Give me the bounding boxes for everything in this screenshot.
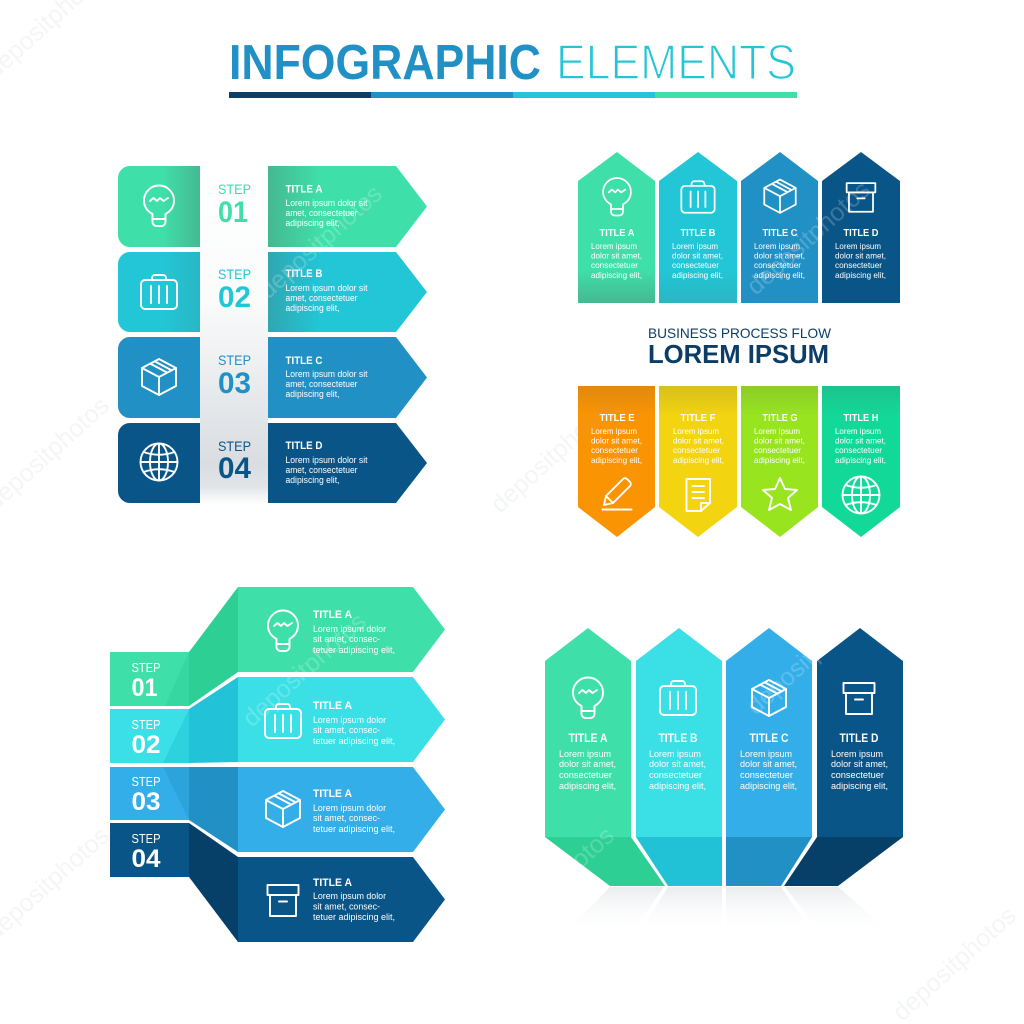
card A: [578, 152, 655, 303]
step row 4: amet, consectetuer: [286, 465, 358, 475]
title: INFOGRAPHIC: [229, 36, 541, 90]
panel: step list: [118, 166, 427, 504]
card F: adipiscing elit,: [673, 455, 724, 465]
card A: TITLE A: [600, 227, 635, 239]
card B: [659, 152, 737, 303]
card B: Lorem ipsum: [672, 241, 718, 251]
step row 1: 01: [218, 196, 248, 229]
column C: consectetuer: [740, 770, 793, 780]
step row 2: Lorem ipsum dolor sit: [286, 283, 368, 293]
ribbon 3: TITLE A: [313, 788, 352, 800]
ribbon 2: sit amet, consec-: [313, 725, 380, 735]
card E: dolor sit amet,: [591, 436, 642, 446]
ribbon 2: 02: [132, 731, 160, 759]
column D: consectetuer: [831, 770, 884, 780]
card A: Lorem ipsum: [591, 241, 637, 251]
step row 1: adipiscing elit,: [286, 218, 340, 228]
card D: consectetuer: [835, 260, 882, 270]
card B: TITLE B: [680, 227, 716, 239]
step row 1: amet, consectetuer: [286, 208, 358, 218]
card F: TITLE F: [680, 412, 716, 424]
column B: adipiscing elit,: [649, 781, 706, 791]
ribbon 3: STEP: [132, 775, 160, 789]
card C: [741, 152, 818, 303]
card D: Lorem ipsum: [835, 241, 881, 251]
card G: TITLE G: [762, 412, 798, 424]
step row 4: STEP: [218, 438, 251, 454]
ribbon 1: [110, 587, 445, 706]
column D: adipiscing elit,: [831, 781, 888, 791]
watermark: depositphotos: [741, 175, 876, 300]
card C: dolor sit amet,: [754, 250, 805, 260]
ribbon 1: 01: [132, 674, 158, 702]
card G: consectetuer: [754, 445, 801, 455]
ribbon 1: Lorem ipsum dolor: [313, 624, 386, 634]
step row 3: TITLE C: [286, 355, 323, 367]
card F: Lorem ipsum: [673, 426, 719, 436]
card G: dolor sit amet,: [754, 436, 805, 446]
step row 2: [118, 252, 427, 332]
panel: downward hexagon cards: [578, 386, 900, 537]
panel: upward hexagon cards: [578, 152, 900, 303]
step row 1: TITLE A: [286, 184, 323, 196]
column B: TITLE B: [658, 733, 698, 745]
title: [229, 36, 796, 90]
step row 3: 03: [218, 367, 251, 400]
ribbon 4: [110, 823, 445, 942]
card F: [659, 386, 737, 537]
card H: consectetuer: [835, 445, 882, 455]
column C: TITLE C: [750, 733, 788, 745]
card A: dolor sit amet,: [591, 250, 642, 260]
step row 3: amet, consectetuer: [286, 379, 358, 389]
ribbon 4: sit amet, consec-: [313, 902, 380, 912]
column A: dolor sit amet,: [559, 759, 616, 769]
column B: Lorem ipsum: [649, 749, 701, 759]
ribbon 1: tetuer adipiscing elit,: [313, 645, 395, 655]
step row 3: [118, 337, 427, 418]
card H: TITLE H: [844, 412, 878, 424]
step row 1: [118, 166, 427, 247]
card D: adipiscing elit,: [835, 270, 886, 280]
card B: dolor sit amet,: [672, 250, 723, 260]
step row 4: 04: [218, 452, 251, 485]
ribbon 2: STEP: [132, 718, 160, 732]
step row 2: adipiscing elit,: [286, 303, 340, 313]
ribbon 4: STEP: [132, 832, 160, 846]
card G: Lorem ipsum: [754, 426, 800, 436]
card D: [822, 152, 900, 303]
watermark: depositphotos: [485, 821, 620, 946]
step row 2: TITLE B: [286, 268, 323, 280]
step row 3: Lorem ipsum dolor sit: [286, 369, 368, 379]
column D: TITLE D: [840, 733, 878, 745]
step row 2: 02: [218, 281, 251, 314]
step row 4: Lorem ipsum dolor sit: [286, 455, 368, 465]
watermark: depositphotos: [253, 179, 388, 304]
panel: folded columns with reflection: [545, 628, 903, 932]
step row 1: STEP: [218, 181, 251, 197]
step row 1: Lorem ipsum dolor sit: [286, 198, 368, 208]
card C: TITLE C: [762, 227, 798, 239]
ribbon 2: Lorem ipsum dolor: [313, 715, 386, 725]
step row 4: adipiscing elit,: [286, 475, 340, 485]
step row 3: adipiscing elit,: [286, 389, 340, 399]
ribbon 3: Lorem ipsum dolor: [313, 803, 386, 813]
card G: [741, 386, 818, 537]
card A: adipiscing elit,: [591, 270, 642, 280]
step row 2: STEP: [218, 266, 251, 282]
column A: adipiscing elit,: [559, 781, 616, 791]
ribbon 4: TITLE A: [313, 877, 352, 889]
ribbon 1: sit amet, consec-: [313, 634, 380, 644]
ribbon 3: sit amet, consec-: [313, 813, 380, 823]
ribbon 2: TITLE A: [313, 700, 352, 712]
card D: dolor sit amet,: [835, 250, 886, 260]
column B: consectetuer: [649, 770, 702, 780]
ribbon 4: tetuer adipiscing elit,: [313, 912, 395, 922]
ribbon 1: TITLE A: [313, 609, 352, 621]
ribbon 4: Lorem ipsum dolor: [313, 891, 386, 901]
ribbon 2: [110, 677, 445, 763]
column B: [636, 628, 722, 886]
card H: adipiscing elit,: [835, 455, 886, 465]
column A: Lorem ipsum: [559, 749, 611, 759]
watermark: depositphotos: [237, 607, 372, 732]
column A: [545, 628, 665, 886]
card H: dolor sit amet,: [835, 436, 886, 446]
card G: adipiscing elit,: [754, 455, 805, 465]
card C: Lorem ipsum: [754, 241, 800, 251]
card F: consectetuer: [673, 445, 720, 455]
card C: consectetuer: [754, 260, 801, 270]
watermark: depositphotos: [485, 393, 620, 518]
ribbon 3: [110, 767, 445, 852]
card E: TITLE E: [600, 412, 634, 424]
ribbon 1: STEP: [132, 661, 160, 675]
column A: TITLE A: [568, 733, 608, 745]
column C: [726, 628, 812, 886]
ribbon 2: tetuer adipiscing elit,: [313, 736, 395, 746]
column B: dolor sit amet,: [649, 759, 706, 769]
step row 2: amet, consectetuer: [286, 293, 358, 303]
card A: consectetuer: [591, 260, 638, 270]
card E: [578, 386, 655, 537]
column A: consectetuer: [559, 770, 612, 780]
card B: consectetuer: [672, 260, 719, 270]
panel: folded step ribbons: [110, 587, 445, 942]
floor reflection: [566, 887, 890, 932]
watermark: depositphotos: [741, 595, 876, 720]
column D: dolor sit amet,: [831, 759, 888, 769]
title colour bar: [229, 92, 797, 98]
title: ELEMENTS: [556, 36, 796, 90]
card B: adipiscing elit,: [672, 270, 723, 280]
card E: Lorem ipsum: [591, 426, 637, 436]
column C: Lorem ipsum: [740, 749, 792, 759]
column C: dolor sit amet,: [740, 759, 797, 769]
step row 4: TITLE D: [286, 440, 323, 452]
heading: business process flow: BUSINESS PROCESS FLOW: [648, 325, 832, 341]
card H: [822, 386, 900, 537]
card D: TITLE D: [844, 227, 879, 239]
heading: business process flow: [648, 325, 832, 369]
card F: dolor sit amet,: [673, 436, 724, 446]
ribbon 3: tetuer adipiscing elit,: [313, 824, 395, 834]
step row 3: STEP: [218, 352, 251, 368]
watermark: depositphotos: [887, 901, 1022, 1024]
ribbon 3: 03: [132, 788, 160, 816]
card E: consectetuer: [591, 445, 638, 455]
card C: adipiscing elit,: [754, 270, 805, 280]
column C: adipiscing elit,: [740, 781, 797, 791]
ribbon 4: 04: [132, 845, 161, 873]
step column shading: [200, 166, 268, 504]
step row 4: [118, 423, 427, 503]
heading: business process flow: LOREM IPSUM: [648, 339, 829, 369]
column D: Lorem ipsum: [831, 749, 883, 759]
card H: Lorem ipsum: [835, 426, 881, 436]
column D: [784, 628, 903, 886]
card E: adipiscing elit,: [591, 455, 642, 465]
